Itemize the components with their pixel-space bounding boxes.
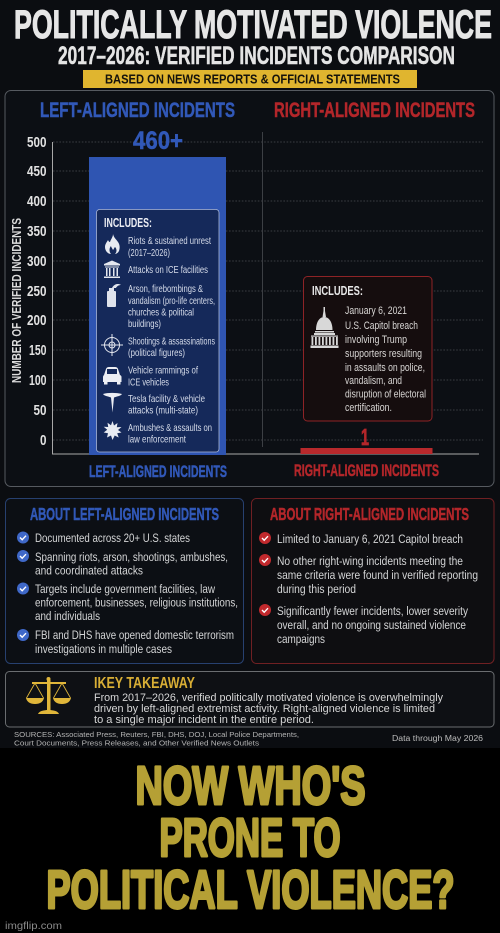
includes list text: vandalism (pro-life centers, [128,296,215,307]
includes list text: Arson, firebombings & [128,284,203,295]
includes list text: law enforcement [128,434,186,446]
heading: left-aligned incidents: LEFT-ALIGNED INCIDENTS [40,98,235,122]
bullet text: No other right-wing incidents meeting the [277,554,463,568]
icon: car [103,367,122,384]
value: 1: 1 [361,424,369,450]
includes list text: Ambushes & assaults on [128,423,212,434]
includes list text: churches & political [128,308,194,318]
includes heading: INCLUDES: [312,283,363,298]
includes body text: supporters resulting [345,348,422,360]
y axis tick labels: 150 [29,343,46,359]
bullet text [277,532,478,646]
takeaway body [94,692,444,726]
check icons [259,532,271,616]
includes list text [128,236,215,446]
heading: ABOUT LEFT-ALIGNED INCIDENTS [30,504,219,524]
includes list text: Riots & sustained unrest [128,236,211,247]
includes list text: Vehicle rammings of [128,366,198,376]
bullet text: campaigns [277,632,325,646]
icon: building columns [104,260,120,278]
icon: crosshair [101,334,123,356]
bullet text: enforcement, businesses, religious institutions, [35,596,238,610]
includes list text: Shootings & assassinations [128,336,215,348]
includes list text: (2017–2026) [128,248,170,259]
meme caption: PRONE TO [160,808,340,868]
icon: starburst [104,421,122,440]
bar: left 460+ [89,157,226,455]
panel: bar chart [5,90,494,486]
panel: about right-aligned incidents [252,498,494,664]
y axis tick labels: 450 [27,164,46,180]
bullet text: Targets include government facilities, law [35,582,215,596]
y axis tick labels: 350 [27,224,46,240]
y axis tick labels: 500 [27,135,46,151]
icon: tesla logo [103,393,122,412]
y axis tick labels: 300 [27,254,46,270]
bullet text: during this period [277,582,356,596]
y axis tick labels: 0 [40,433,46,449]
value: 460+: 460+ [133,127,183,155]
icon: flame [105,234,120,254]
y axis title: NUMBER OF VERIFIED INCIDENTS [9,218,24,383]
check icons [17,532,29,641]
bullet text: and coordinated attacks [35,564,143,578]
bar: right 1 [300,448,432,454]
y axis tick labels: 200 [27,313,46,329]
includes body text: U.S. Capitol breach [345,320,418,332]
includes list text: (political figures) [128,348,185,359]
y axis tick labels [27,135,46,449]
panel: takeaway [6,672,494,727]
watermark: imgflip.com [5,920,62,932]
sources: SOURCES: Associated Press, Reuters, FBI, DHS, DOJ, Local Police Departments, [14,730,299,739]
meme caption: NOW WHO'S [136,756,366,816]
bullet text: investigations in multiple cases [35,642,172,656]
icon: capitol building [310,307,338,348]
heading: IKEY TAKEAWAY [94,675,196,692]
includes list text: buildings) [128,319,161,330]
includes list text: Attacks on ICE facilities [128,265,208,276]
y axis tick labels: 100 [29,373,46,389]
bullet text [35,531,238,656]
includes body text: disruption of electoral [345,388,426,400]
icon: spray can [107,284,121,307]
bullet text: FBI and DHS have opened domestic terrorism [35,628,234,642]
y axis tick labels: 400 [27,194,46,210]
panel: left includes box [96,210,219,452]
panel: right includes box [304,276,432,421]
includes heading: INCLUDES: [104,216,152,230]
meme caption [46,756,454,920]
includes body text [345,305,426,414]
bullet text: Documented across 20+ U.S. states [35,531,190,545]
bullet text: and individuals [35,609,100,623]
includes body text: certification. [345,402,392,414]
banner: based on news reports: BASED ON NEWS REPORTS & OFFICIAL STATEMENTS [105,72,400,86]
includes body text: in assaults on police, [345,362,425,374]
bullet text: Limited to January 6, 2021 Capitol breach [277,532,463,546]
icon: scales of justice [26,677,71,714]
includes list text: Tesla facility & vehicle [128,394,205,405]
includes body text: January 6, 2021 [345,305,407,317]
bullet text: Spanning riots, arson, shootings, ambushes, [35,550,228,564]
panel: about left-aligned incidents [6,498,244,664]
takeaway body: driven by left-aligned extremist activity. Right-aligned violence is limited [94,703,435,715]
axis label: left: LEFT-ALIGNED INCIDENTS [89,463,227,481]
includes body text: vandalism, and [345,375,402,387]
sources [14,730,299,748]
takeaway body: From 2017–2026, verified politically motivated violence is overwhelmingly [94,692,444,704]
includes body text: involving Trump [345,334,407,346]
data date: Data through May 2026 [392,734,484,743]
includes list text: attacks (multi-state) [128,406,198,416]
takeaway body: to a single major incident in the entire period. [94,714,314,726]
sources: Court Documents, Press Releases, and Other Verified News Outlets [14,738,259,748]
y axis tick labels: 50 [34,403,46,419]
includes list text: ICE vehicles [128,378,169,388]
y axis tick labels: 250 [27,284,46,300]
